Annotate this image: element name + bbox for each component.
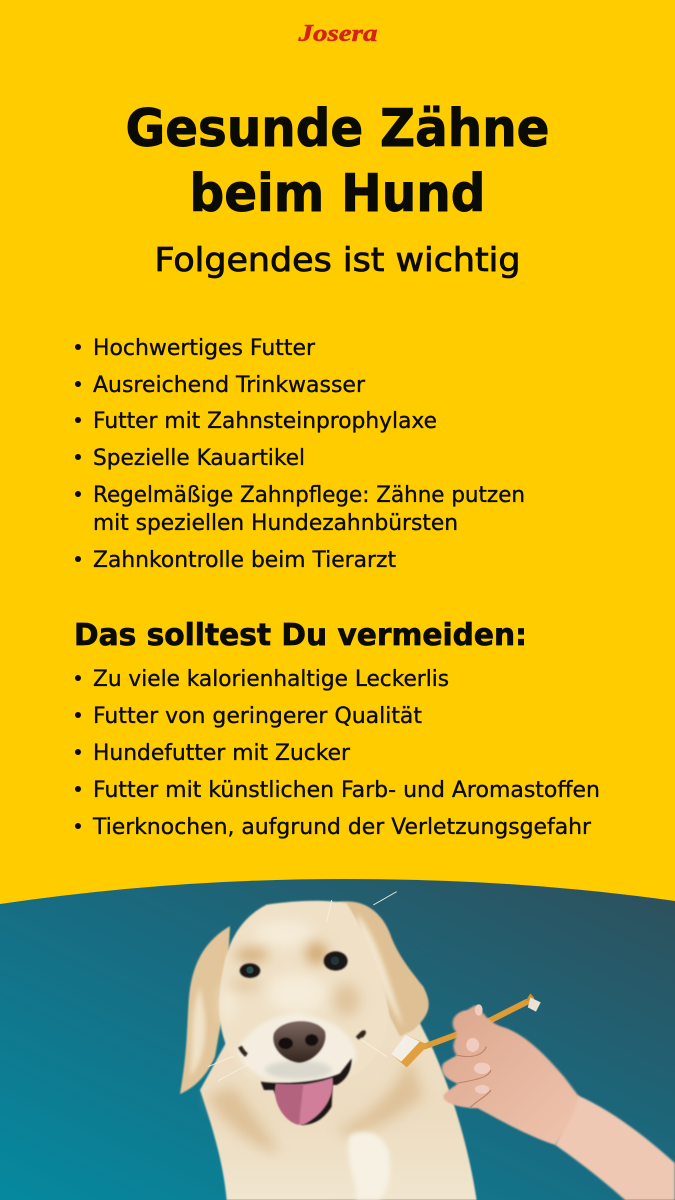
list: what is important (75, 336, 525, 573)
photo panel: teal wall with curved top (0, 879, 675, 1200)
list: what is important: mit speziellen Hundezahnbürsten (93, 511, 458, 536)
mouth (261, 1058, 352, 1125)
left ear highlight (190, 987, 205, 1077)
hand (442, 1005, 579, 1145)
dog (180, 892, 477, 1200)
list: what is important: Ausreichend Trinkwasser (93, 373, 366, 398)
arm (555, 1095, 675, 1200)
list: what to avoid: Hundefutter mit Zucker (93, 741, 351, 766)
title: beim Hund (190, 164, 486, 224)
nose (273, 1021, 325, 1063)
brow markings (228, 943, 360, 1017)
right ear (337, 901, 429, 1037)
illustration: golden retriever with toothbrush (180, 892, 675, 1200)
title: Gesunde Zähne (126, 99, 550, 159)
list: what to avoid: Futter von geringerer Qualität (93, 704, 422, 729)
forehead light (222, 920, 327, 1023)
fingernails (466, 1004, 490, 1094)
chest fluff (348, 1132, 390, 1200)
list: what is important: Spezielle Kauartikel (93, 446, 305, 471)
logo: Josera: Josera (297, 21, 378, 47)
toothbrush (391, 993, 541, 1067)
muzzle (237, 1013, 357, 1085)
mouth corners (240, 1032, 364, 1055)
list: what to avoid: Futter mit künstlichen Farb- und Aromastoffen (93, 778, 600, 803)
finger lines (456, 1047, 491, 1108)
right eye (324, 951, 348, 971)
subtitle: Folgendes ist wichtig (154, 240, 520, 279)
whiskers (208, 892, 397, 1081)
chin grey (265, 1061, 332, 1079)
dog body (200, 990, 477, 1200)
arm and hand (391, 993, 675, 1200)
title (126, 99, 550, 224)
left eye (240, 963, 260, 978)
left ear (180, 926, 230, 1094)
list: what is important: Futter mit Zahnsteinprophylaxe (93, 409, 437, 434)
neck shading (207, 1057, 423, 1153)
head (218, 900, 390, 1045)
list: what to avoid: Zu viele kalorienhaltige Leckerlis (93, 667, 449, 692)
list: what is important: Regelmäßige Zahnpflege: Zähne putzen (93, 483, 525, 508)
list: what is important: Zahnkontrolle beim Tierarzt (93, 548, 396, 573)
heading: avoid: Das solltest Du vermeiden: (74, 618, 527, 653)
list: what to avoid (75, 667, 600, 840)
tongue (275, 1077, 333, 1125)
list: what to avoid: Tierknochen, aufgrund der Verletzungsgefahr (92, 815, 592, 840)
tongue shade (275, 1084, 303, 1125)
right ear highlight (357, 913, 403, 1027)
list: what is important: Hochwertiges Futter (93, 336, 316, 361)
